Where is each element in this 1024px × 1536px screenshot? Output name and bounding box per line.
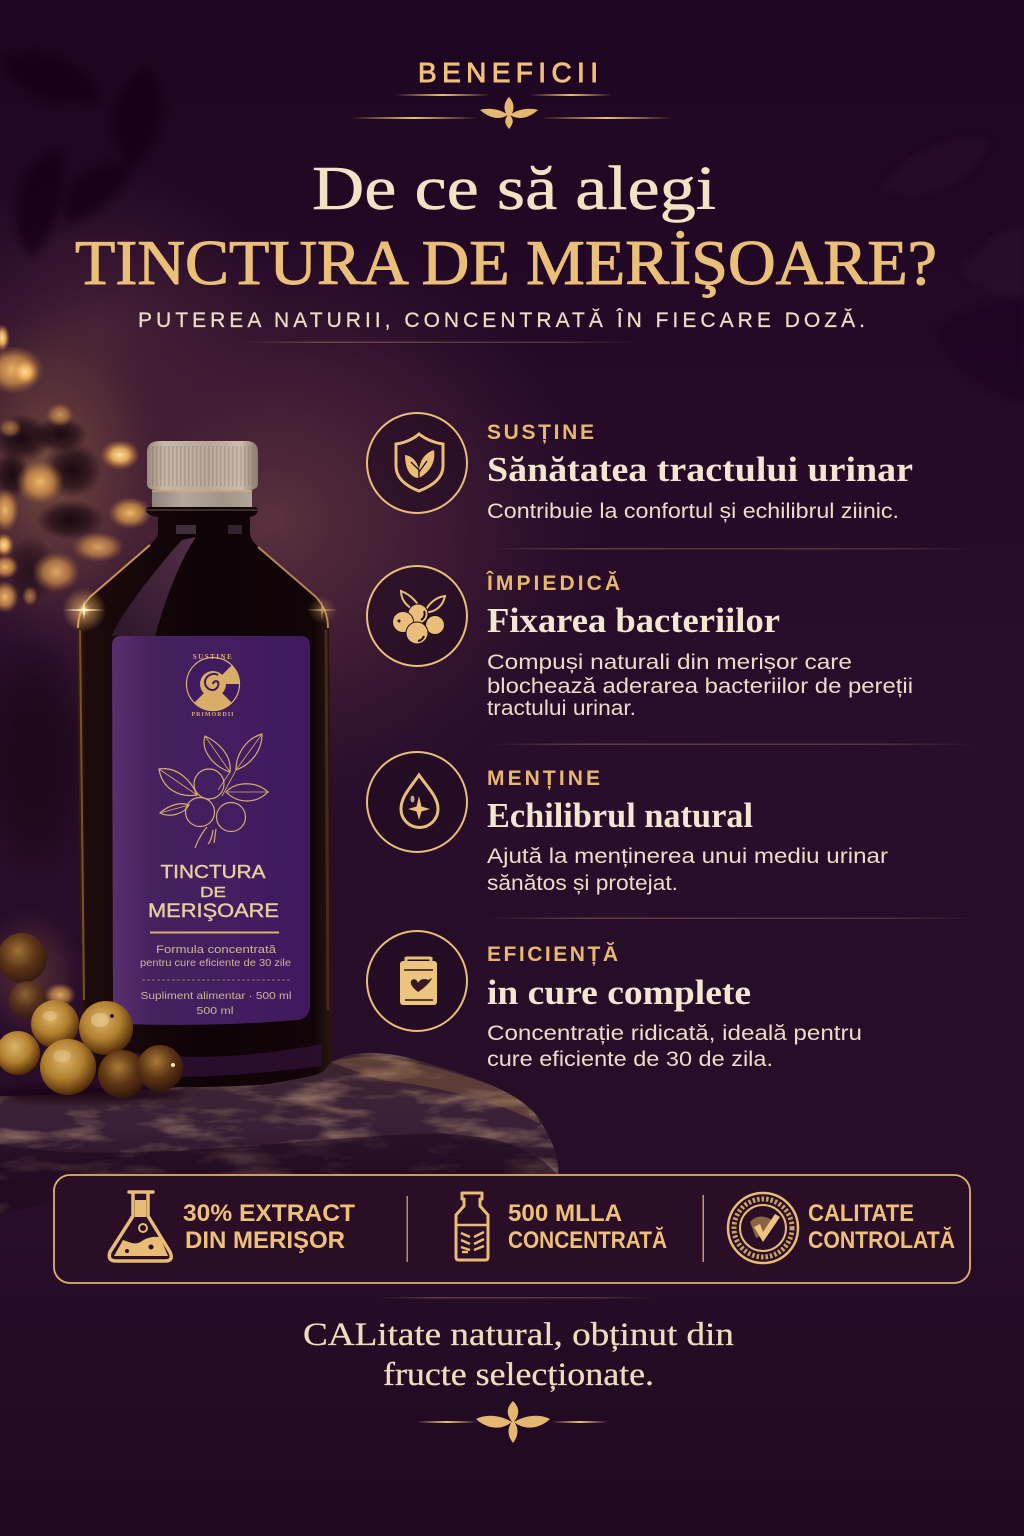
main title <box>75 155 937 298</box>
ornament: bottom <box>417 1401 608 1443</box>
sparkles <box>62 588 338 632</box>
text: benefit 2: blochează aderarea bacteriilor de pereții <box>487 675 913 698</box>
bottle label: pentru cure eficiente de 30 zile <box>140 958 291 969</box>
stat: quality <box>728 1193 955 1263</box>
berries in front of bottle <box>0 1000 185 1101</box>
text: benefit 2: tractului urinar. <box>487 697 636 720</box>
stat: extract <box>109 1192 355 1261</box>
stone pedestal <box>0 1053 558 1216</box>
background foliage <box>0 52 162 258</box>
label emblem: SUSTINE <box>193 653 233 661</box>
text: benefit 3: sănătos și protejat. <box>487 872 678 895</box>
header: kicker <box>350 57 673 129</box>
label berry illustration <box>159 734 268 848</box>
text: benefit 1: Contribuie la confortul și echilibrul ziinic. <box>487 500 899 523</box>
main title: De ce să alegi <box>312 155 716 223</box>
text: benefit 2: Fixarea bacteriilor <box>487 601 780 640</box>
text: benefit 4 <box>487 943 862 1071</box>
subtitle: PUTEREA NATURII, CONCENTRATĂ ÎN FIECARE DOZĂ. <box>138 309 865 332</box>
benefit 2 <box>367 566 913 720</box>
text: benefit 3: MENȚINE <box>487 767 600 790</box>
stat: quality: CALITATE <box>808 1200 914 1227</box>
benefit 4 <box>367 931 862 1071</box>
text: benefit 4: EFICIENȚĂ <box>487 943 618 966</box>
text: benefit 4: Concentrație ridicată, ideală pentru <box>487 1022 862 1045</box>
benefit 1 <box>367 413 913 523</box>
closing statement <box>303 1297 734 1393</box>
stat: extract: 30% EXTRACT <box>183 1200 355 1227</box>
bottle label: Supliment alimentar · 500 ml <box>140 990 292 1002</box>
label title: DE <box>200 884 226 901</box>
stat: volume: 500 MLLA <box>508 1200 622 1227</box>
stat: quality: CONTROLATĂ <box>808 1226 955 1254</box>
label title: MERIŞOARE <box>148 901 279 922</box>
icon: shield with leaf <box>367 413 467 513</box>
bokeh foliage <box>0 280 180 1045</box>
stat: volume: CONCENTRATĂ <box>508 1226 667 1254</box>
text: benefit 2: Compuși naturali din merișor care <box>487 651 852 674</box>
text: benefit 3: Ajută la menținerea unui mediu urinar <box>487 845 888 868</box>
berries behind bottle <box>0 933 76 1019</box>
icon: calendar with heart <box>367 931 467 1031</box>
text: benefit 2: ÎMPIEDICĂ <box>486 571 620 595</box>
benefit 3 <box>367 752 888 895</box>
icon: berries <box>367 566 467 666</box>
text: benefit 4: cure eficiente de 30 de zila. <box>487 1048 773 1071</box>
text: benefit 1: SUSȚINE <box>487 421 594 444</box>
header: kicker: BENEFICII <box>418 57 598 88</box>
stats panel <box>54 1175 970 1283</box>
closing statement: fructe selecționate. <box>383 1357 654 1393</box>
icon: drop with sparkle <box>367 752 467 852</box>
ornament: top <box>350 94 673 129</box>
label emblem <box>186 653 240 718</box>
icon: small bottle <box>456 1193 488 1260</box>
text: benefit 3: Echilibrul natural <box>487 796 753 835</box>
bottle cap <box>147 441 258 507</box>
text: benefit 1: Sănătatea tractului urinar <box>487 450 913 489</box>
closing statement: CALitate natural, obținut din <box>303 1317 734 1353</box>
icon: quality seal <box>728 1193 798 1263</box>
text: benefit 4: in cure complete <box>487 973 751 1012</box>
label small text: Formula concentrată <box>156 944 277 956</box>
label emblem: PRIMORDII <box>192 712 234 718</box>
bottle glass <box>77 507 332 1087</box>
label title <box>148 861 279 922</box>
main title: TINCTURA DE MERİŞOARE? <box>75 228 937 298</box>
stat: extract: DIN MERIŞOR <box>185 1227 345 1254</box>
text: benefit 2 <box>486 571 913 720</box>
icon: flask <box>109 1192 171 1261</box>
text: benefit 1 <box>487 421 913 523</box>
stat: volume <box>456 1193 667 1260</box>
bottle label: 500 ml <box>196 1005 234 1017</box>
label title: TINCTURA <box>160 861 266 882</box>
bottle <box>62 441 338 1087</box>
text: benefit 3 <box>487 767 888 895</box>
bottle label <box>112 636 310 1025</box>
